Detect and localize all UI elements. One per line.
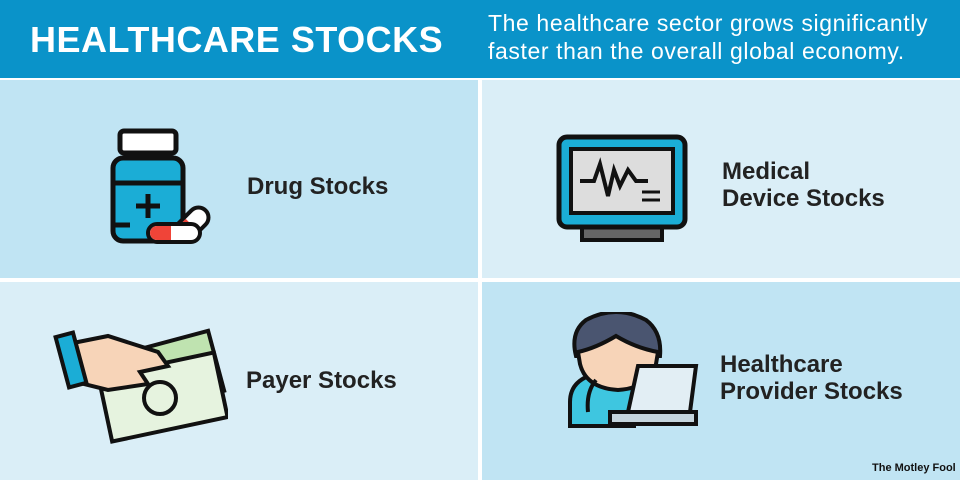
panel: healthcare provider stocks: [482, 282, 960, 480]
label: healthcare provider stocks: [720, 351, 903, 405]
label: healthcare provider stocks: Healthcare: [720, 351, 843, 378]
label: healthcare provider stocks: Provider Stocks: [720, 378, 903, 405]
icon: hand with money: [53, 328, 228, 444]
label: medical device stocks: Device Stocks: [722, 185, 885, 212]
label: drug stocks: Drug Stocks: [247, 173, 388, 200]
label: medical device stocks: Medical: [722, 158, 810, 185]
panel: drug stocks: [0, 80, 478, 278]
subtitle: The healthcare sector grows significantly: [488, 10, 928, 36]
logo: the motley fool: The Motley Fool: [872, 462, 956, 474]
label: payer stocks: Payer Stocks: [246, 367, 397, 394]
header bar: [0, 0, 960, 78]
label: medical device stocks: [722, 158, 885, 212]
panel: payer stocks: [0, 282, 478, 480]
icon: monitor: [556, 134, 688, 242]
subtitle: faster than the overall global economy.: [488, 38, 905, 64]
panel: medical device stocks: [482, 80, 960, 278]
icon: doctor with laptop: [568, 312, 698, 428]
subtitle: [488, 10, 928, 64]
icon: pill bottle: [110, 128, 210, 244]
title: HEALTHCARE STOCKS: [30, 19, 443, 60]
